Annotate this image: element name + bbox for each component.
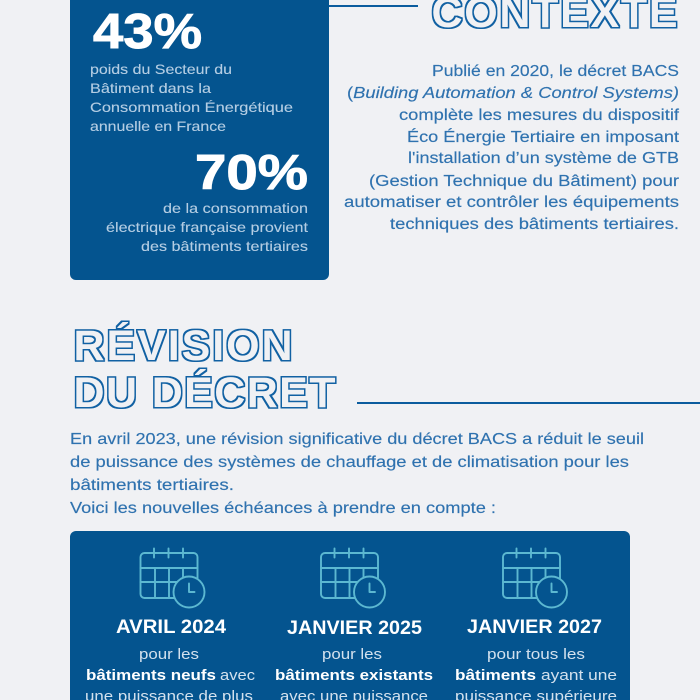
- text: janvier 2027 conditions: pour tous les: [487, 646, 585, 663]
- text: 70% description: des bâtiments tertiaires: [141, 238, 308, 254]
- icon: calendar and clock: [140, 548, 204, 608]
- text block: contexte: l'installation d’un système de GTB: [408, 150, 679, 167]
- text block: contexte: techniques des bâtiments tertiaires.: [390, 216, 679, 233]
- text: 43% description: Consommation Énergétique: [90, 99, 293, 115]
- date: janvier 2027: JANVIER 2027: [467, 617, 602, 638]
- text: janvier 2027 conditions: [455, 646, 617, 700]
- date: avril 2024: AVRIL 2024: [116, 617, 226, 638]
- text: 70% description: [106, 200, 308, 254]
- text: janvier 2027 conditions: ayant une: [541, 667, 617, 684]
- text: janvier 2025 conditions: [275, 646, 433, 700]
- text: 43% description: [90, 61, 293, 134]
- text block: contexte: [344, 63, 680, 233]
- figure: 43%: 43%: [93, 5, 202, 59]
- text: 43% description: Bâtiment dans la: [90, 80, 211, 96]
- text block: contexte: Publié en 2020, le décret BACS: [432, 63, 679, 80]
- text: 43% description: poids du Secteur du: [90, 61, 232, 77]
- text block: révision: [70, 431, 644, 517]
- text: avril 2024 conditions: bâtiments neufs: [86, 667, 216, 684]
- text block: contexte: Éco Énergie Tertiaire en imposant: [407, 129, 680, 146]
- text block: révision: Voici les nouvelles échéances à prendre en compte :: [70, 500, 496, 517]
- column: janvier 2027: [455, 548, 617, 700]
- column: janvier 2025: [275, 548, 433, 700]
- date: janvier 2025: JANVIER 2025: [287, 618, 422, 639]
- heading rule: révision: [357, 402, 700, 404]
- icon: calendar and clock: [321, 548, 385, 608]
- text block: contexte: complète les mesures du dispositif: [399, 107, 680, 124]
- heading: révision du décret: [74, 322, 336, 417]
- text: avril 2024 conditions: avec: [220, 667, 256, 684]
- heading: révision du décret: RÉVISION: [74, 322, 292, 370]
- panel: key figures: [70, 0, 329, 280]
- text: janvier 2027 conditions: bâtiments: [455, 667, 536, 684]
- text: janvier 2025 conditions: pour les: [322, 646, 382, 663]
- text: 70% description: de la consommation: [163, 200, 308, 216]
- text block: révision: bâtiments tertiaires.: [70, 477, 234, 494]
- text: janvier 2025 conditions: bâtiments existants: [275, 667, 433, 684]
- icon: calendar and clock: [503, 548, 567, 608]
- text: avril 2024 conditions: pour les: [139, 646, 199, 663]
- heading rule: contexte: [329, 5, 418, 7]
- heading: révision du décret: DU DÉCRET: [74, 369, 336, 417]
- text: avril 2024 conditions: [85, 646, 256, 700]
- text block: contexte: (Building Automation & Control Systems): [347, 85, 679, 102]
- figure: 70%: 70%: [195, 146, 308, 200]
- text block: contexte: automatiser et contrôler les équipements: [344, 194, 679, 211]
- column: avril 2024: [85, 548, 256, 700]
- text: 70% description: électrique française provient: [106, 219, 308, 235]
- text block: contexte: (Gestion Technique du Bâtiment) pour: [369, 173, 679, 190]
- panel: échéances: [70, 531, 630, 700]
- text block: révision: de puissance des systèmes de chauffage et de climatisation pour les: [70, 454, 629, 471]
- text block: révision: En avril 2023, une révision significative du décret BACS a réduit le seuil: [70, 431, 644, 448]
- text: 43% description: annuelle en France: [90, 118, 226, 134]
